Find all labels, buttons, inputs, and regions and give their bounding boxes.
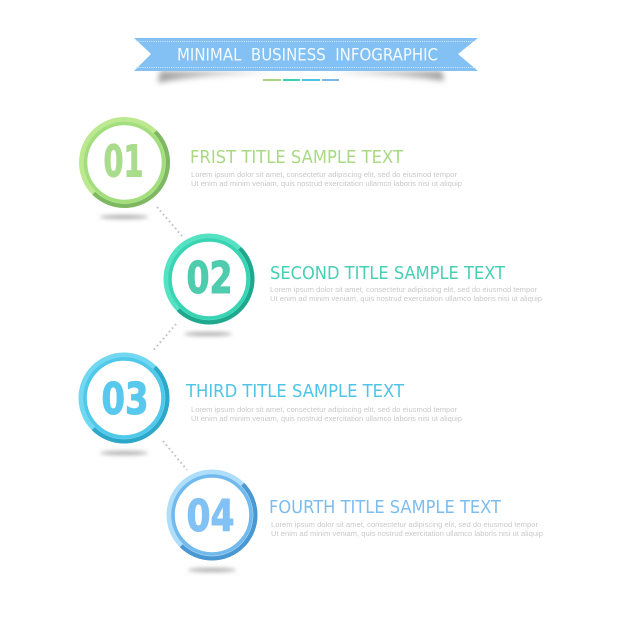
step 4 number: 04 <box>186 491 234 542</box>
step 1 text: Ut enim ad minim veniam, quis nostrud exercitation ullamco laboris nisi ut aliquip <box>191 179 462 188</box>
step 4 text: Ut enim ad minim veniam, quis nostrud exercitation ullamco laboris nisi ut aliquip <box>271 529 543 538</box>
step 2 text: Ut enim ad minim veniam, quis nostrud exercitation ullamco laboris nisi ut aliquip <box>270 294 542 303</box>
step 4 text <box>271 520 543 538</box>
step 2 text <box>270 285 542 303</box>
banner title: MINIMAL BUSINESS INFOGRAPHIC <box>177 46 438 64</box>
step 2 shadow <box>184 332 232 336</box>
step 3 text: Ut enim ad minim veniam, quis nostrud exercitation ullamco laboris nisi ut aliquip <box>191 414 462 423</box>
colour bars <box>263 79 339 81</box>
title banner <box>134 38 478 83</box>
step 1 text: Lorem ipsum dolor sit amet, consectetur adipiscing elit, sed do eiusmod tempor <box>191 170 457 179</box>
step 3 shadow <box>100 451 148 455</box>
banner shadow <box>158 71 444 83</box>
step 2 title: SECOND TITLE SAMPLE TEXT <box>270 263 506 284</box>
step 4 <box>169 472 543 572</box>
step 1 title: FRIST TITLE SAMPLE TEXT <box>190 147 404 168</box>
step 3 title: THIRD TITLE SAMPLE TEXT <box>185 381 405 402</box>
step 4 title: FOURTH TITLE SAMPLE TEXT <box>269 497 502 518</box>
step 3 ring <box>81 355 167 441</box>
step 3 <box>81 355 462 455</box>
step 4 shadow <box>188 568 236 572</box>
step 3 number: 03 <box>102 374 148 425</box>
step 1 <box>82 120 462 219</box>
step 2 <box>166 236 542 336</box>
step 3 text <box>191 405 462 423</box>
step 1 number: 01 <box>104 136 144 188</box>
step 2 ring <box>166 236 252 322</box>
step 1 shadow <box>100 215 148 219</box>
dotted connectors <box>152 207 187 470</box>
ribbon <box>134 38 478 71</box>
step 2 text: Lorem ipsum dolor sit amet, consectetur adipiscing elit, sed do eiusmod tempor <box>270 285 537 294</box>
step 4 ring <box>169 472 255 558</box>
step 1 ring <box>82 120 168 206</box>
step 4 text: Lorem ipsum dolor sit amet, consectetur adipiscing elit, sed do eiusmod tempor <box>271 520 538 529</box>
step 1 text <box>191 170 462 188</box>
step 3 text: Lorem ipsum dolor sit amet, consectetur adipiscing elit, sed do eiusmod tempor <box>191 405 457 414</box>
step 2 number: 02 <box>186 253 232 304</box>
